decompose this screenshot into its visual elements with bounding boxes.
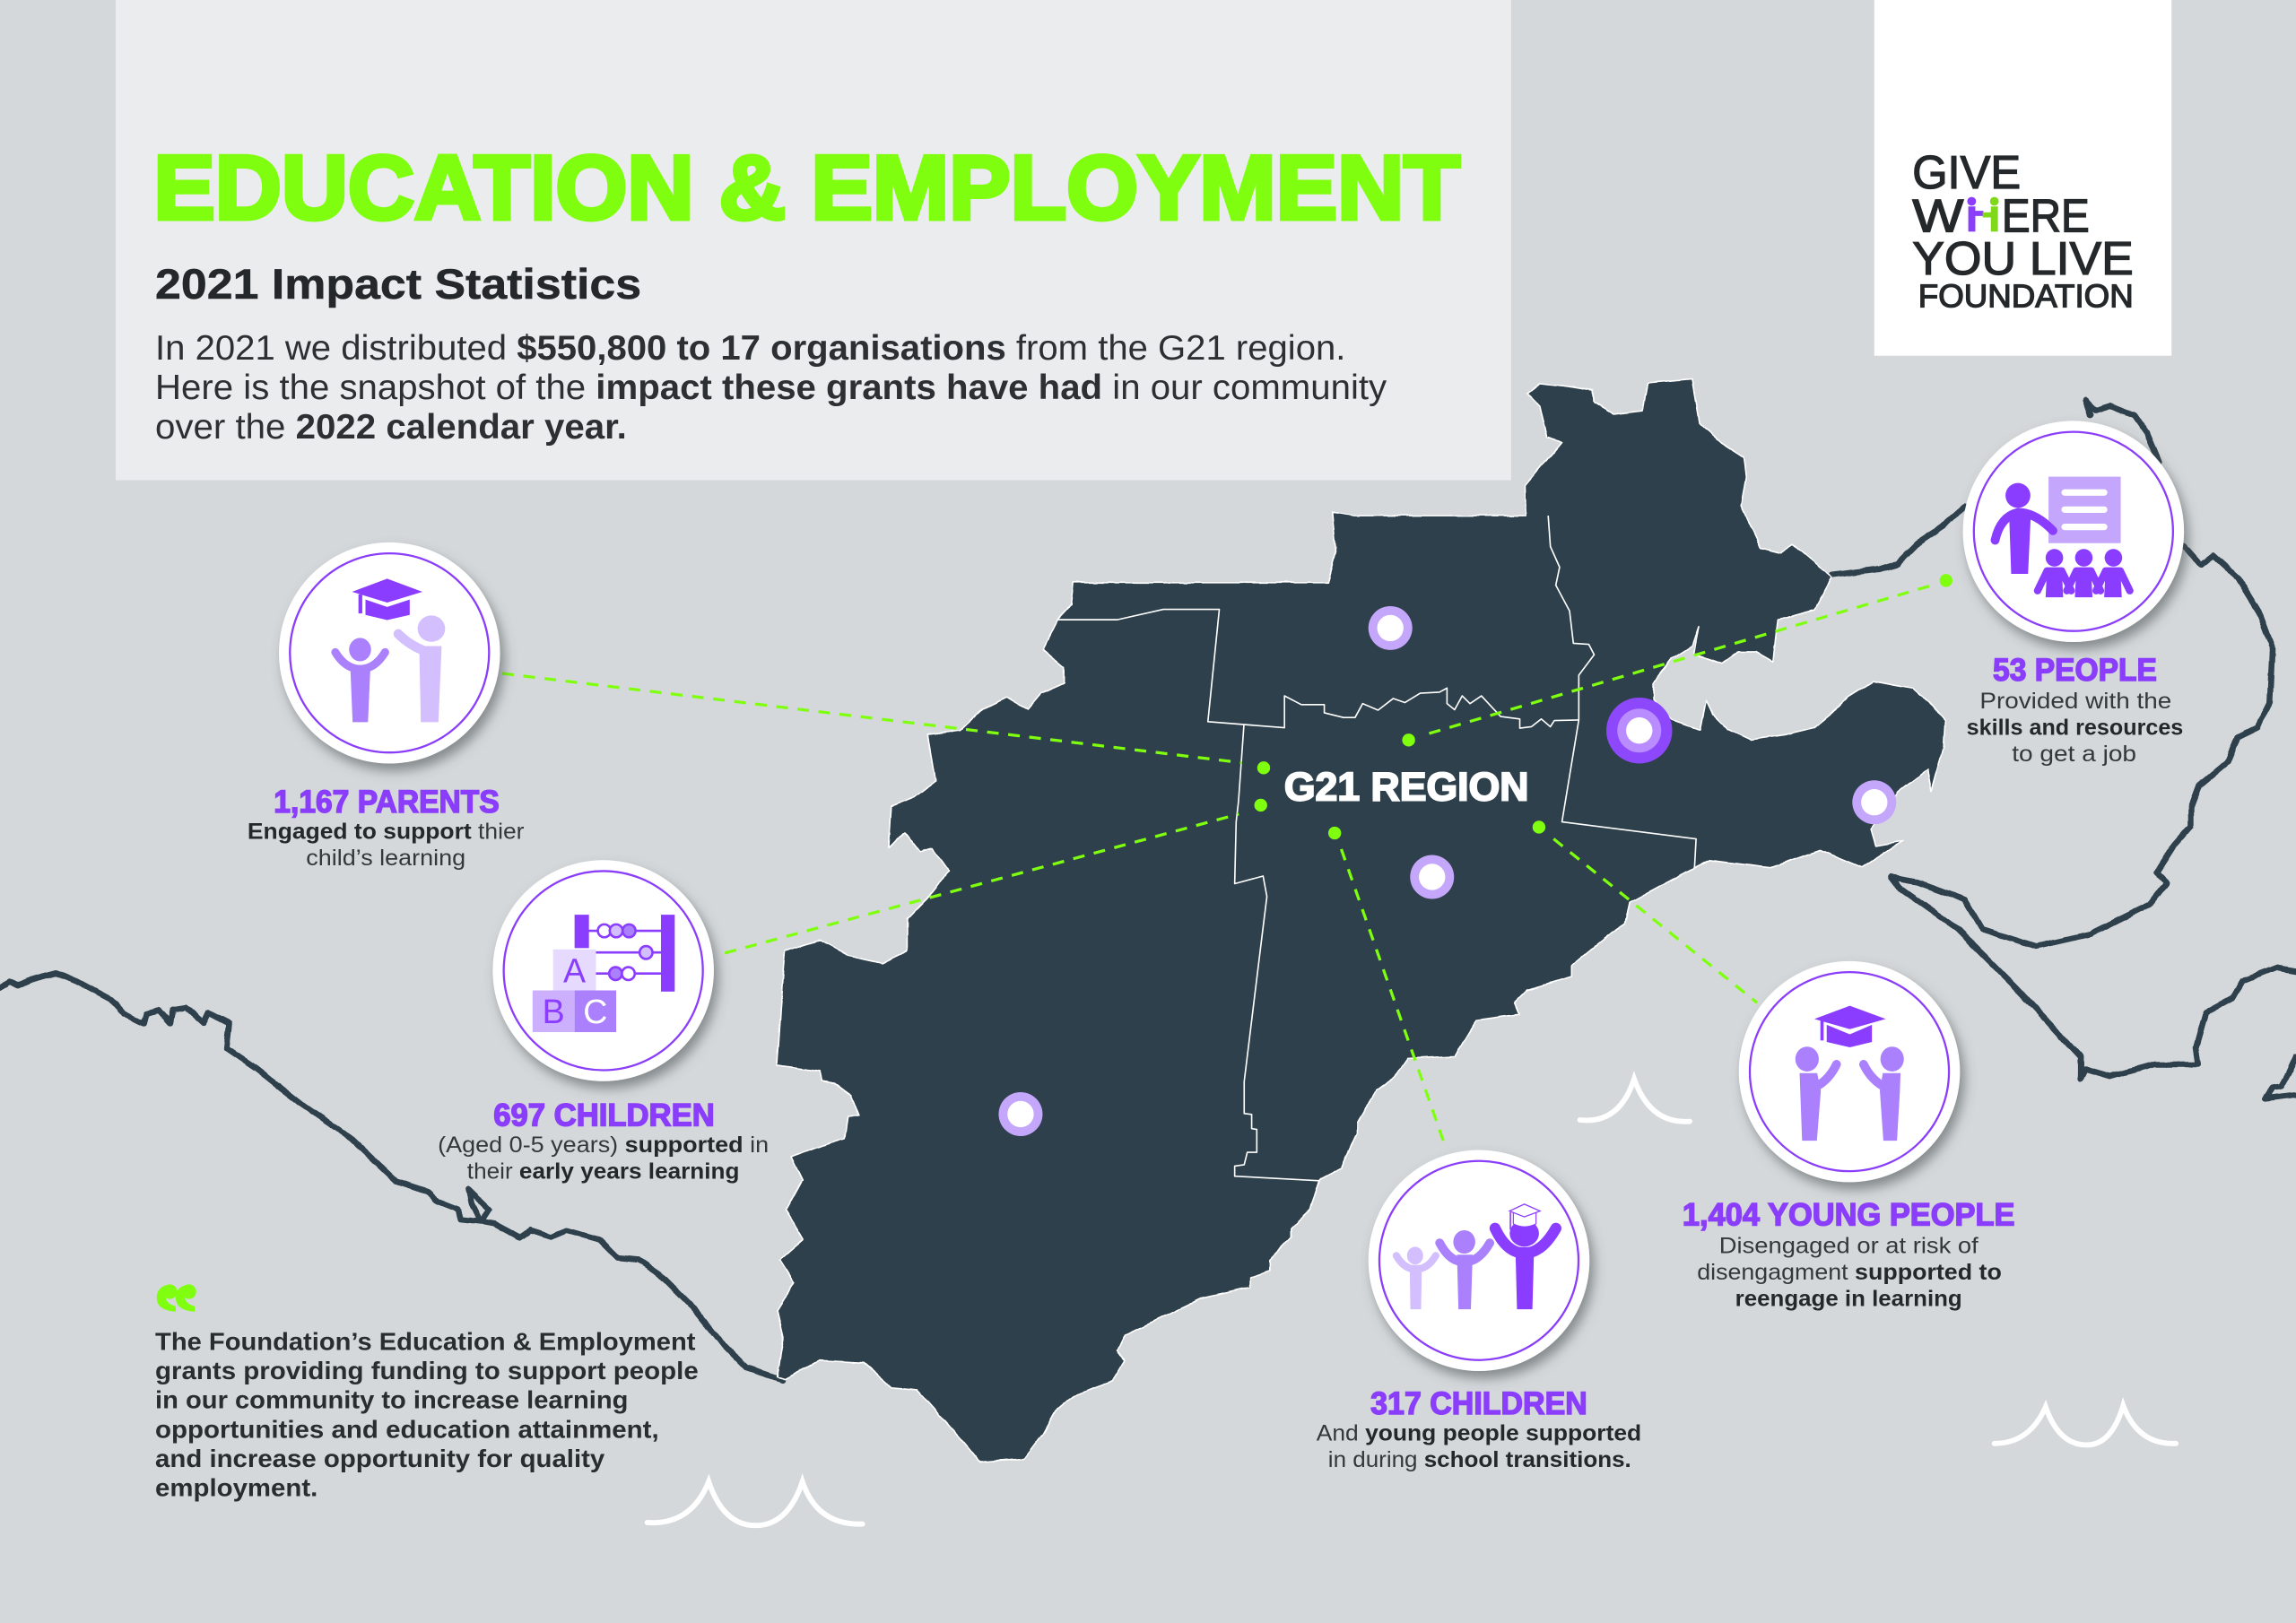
stat heading: 53 PEOPLE — [1993, 653, 2157, 688]
map: G21 region — [777, 379, 1945, 1462]
stat: 53 people — [1963, 421, 2184, 767]
logo: Give Where You Live Foundation: W — [1912, 190, 1964, 242]
stat description: And young people supported — [1317, 1421, 1641, 1446]
stat description — [1967, 689, 2183, 767]
logo: Give Where You Live Foundation — [1874, 0, 2171, 356]
panel: header — [116, 0, 1511, 481]
quote text block: and increase opportunity for quality — [155, 1445, 605, 1472]
title: EDUCATION & EMPLOYMENT — [153, 137, 1460, 239]
icon: three growing children with cap — [1369, 1150, 1589, 1371]
connector: children early years — [725, 799, 1267, 953]
stat description — [1317, 1421, 1641, 1472]
stat description: skills and resources — [1967, 716, 2183, 741]
stat: 1,167 parents — [248, 542, 524, 871]
stat heading: 317 CHILDREN — [1370, 1386, 1587, 1421]
stat description: reengage in learning — [1735, 1286, 1962, 1311]
far east coastline fragment — [2266, 1057, 2296, 1098]
icon: two figures with graduation cap — [1739, 961, 1960, 1182]
stat description: Disengaged or at risk of — [1719, 1234, 1979, 1259]
intro text block: In 2021 we distributed $550,800 to 17 organisations from the G21 region. — [155, 329, 1345, 368]
stat description: child’s learning — [306, 846, 465, 871]
quote text block: opportunities and education attainment, — [155, 1415, 659, 1443]
stat description: Engaged to support thier — [248, 820, 524, 845]
stat description: disengagment supported to — [1697, 1260, 2002, 1285]
stat description — [248, 820, 524, 871]
quote text block: grants providing funding to support people — [155, 1357, 699, 1384]
east coastline — [1832, 507, 1965, 575]
stat description: in during school transitions. — [1328, 1447, 1631, 1472]
icon: two figures forming the letter H — [1967, 197, 1999, 231]
stat heading: 1,167 PARENTS — [274, 785, 500, 820]
stat: 317 children — [1317, 1150, 1641, 1472]
logo: Give Where You Live Foundation: FOUNDATION — [1918, 278, 2134, 315]
stat description: Provided with the — [1979, 689, 2171, 714]
connector: school transitions — [1328, 827, 1445, 1146]
icon: abacus and alphabet blocks: A — [563, 952, 586, 990]
icon: teacher with students and board — [1963, 421, 2184, 642]
intro text block: Here is the snapshot of the impact these grants have had in our community — [155, 369, 1387, 407]
quote text block: The Foundation’s Education & Employment — [155, 1327, 696, 1355]
quote text block: in our community to increase learning — [155, 1386, 628, 1414]
logo: Give Where You Live Foundation: ERE — [2002, 190, 2090, 242]
quote text block: employment. — [155, 1474, 317, 1502]
internal boundaries — [1058, 516, 1696, 1181]
east coastline: peninsula loop — [1891, 545, 2296, 1079]
icon: parent and child with graduation cap — [279, 542, 500, 763]
quote text block — [155, 1327, 699, 1502]
map landmass — [777, 379, 1945, 1462]
east coastline: top section — [2085, 401, 2159, 462]
subheading: 2021 Impact Statistics — [155, 261, 641, 308]
west coastline — [0, 973, 782, 1380]
connector: jobs — [1402, 574, 1952, 747]
icon: quote mark — [157, 1284, 196, 1312]
stat: 1,404 young people — [1683, 961, 2015, 1311]
stat heading: 697 CHILDREN — [493, 1098, 715, 1133]
connector: young people — [1533, 820, 1757, 1002]
icon: abacus and alphabet blocks: B — [543, 993, 565, 1030]
stat description — [438, 1133, 769, 1184]
connector: parents — [502, 673, 1270, 775]
stat description — [1697, 1234, 2002, 1311]
waves — [648, 1079, 2176, 1525]
G21 region label: G21 REGION — [1284, 765, 1528, 809]
logo: Give Where You Live Foundation: GIVE — [1912, 147, 2021, 199]
stat description: (Aged 0-5 years) supported in — [438, 1133, 769, 1158]
stat heading: 1,404 YOUNG PEOPLE — [1683, 1198, 2015, 1233]
stat description: their early years learning — [467, 1159, 739, 1184]
stat description: to get a job — [2012, 742, 2136, 767]
map pins — [998, 606, 1896, 1136]
intro text block — [155, 329, 1387, 447]
intro text block: over the 2022 calendar year. — [155, 408, 627, 447]
logo: Give Where You Live Foundation: YOU LIVE — [1912, 233, 2134, 285]
icon: abacus and alphabet blocks — [492, 860, 714, 1081]
icon: abacus and alphabet blocks: C — [583, 993, 607, 1030]
stat: 697 children — [438, 860, 769, 1184]
